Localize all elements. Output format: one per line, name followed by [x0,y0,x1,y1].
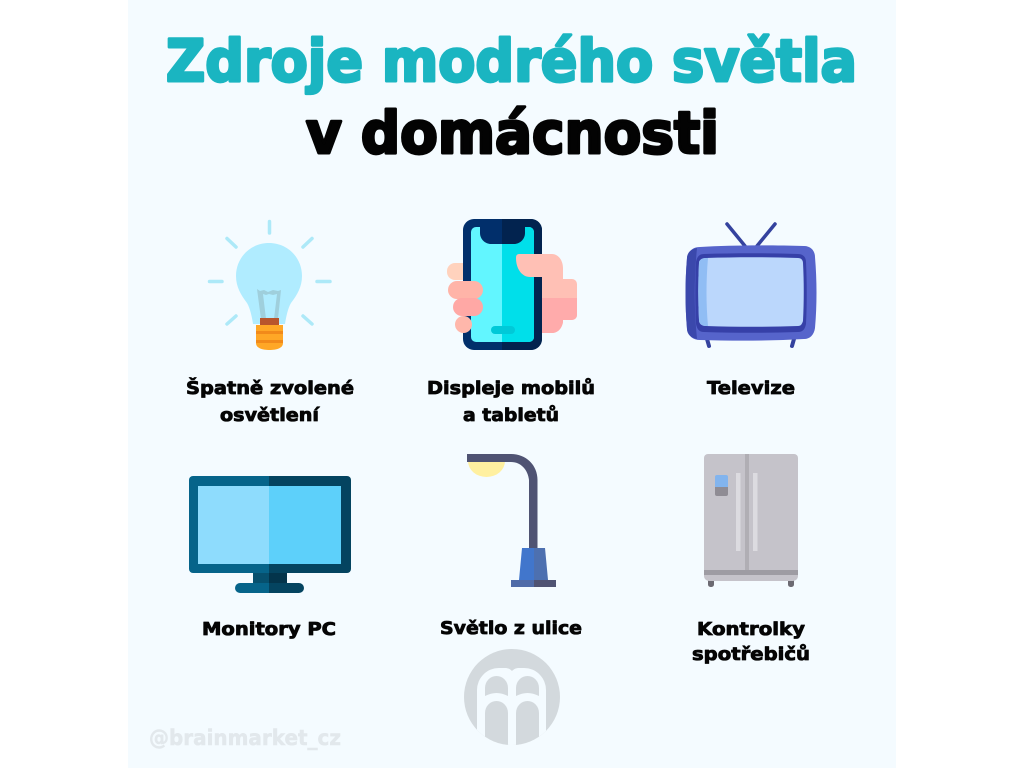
icon: light bulb [210,222,330,350]
label: Displeje mobilů a tabletů: a tabletů [463,404,559,426]
watermark handle: @brainmarket_cz [149,726,341,750]
icon: television [686,224,816,346]
label: Televize: Televize [707,378,795,399]
label: Displeje mobilů a tabletů: Displeje mobilů [427,377,595,399]
logo [464,649,560,750]
label: Kontrolky spotřebičů: Kontrolky [697,619,805,640]
title [166,27,857,167]
label: Displeje mobilů a tabletů [427,377,595,426]
label: Špatně zvolené osvětlení: Špatně zvolené [186,377,354,399]
label: Kontrolky spotřebičů [692,619,810,665]
label: Špatně zvolené osvětlení [186,377,354,426]
background panel [128,0,896,768]
icon: PC monitor [189,476,351,593]
title: Zdroje modrého světla [166,27,857,95]
title: v domácnosti [306,99,719,167]
icon: street lamp [467,454,556,587]
label: Špatně zvolené osvětlení: osvětlení [220,405,320,426]
icon: hand holding phone [447,219,577,350]
label: Světlo z ulice: Světlo z ulice [440,618,582,639]
label: Kontrolky spotřebičů: spotřebičů [692,643,810,665]
label: Monitory PC: Monitory PC [202,619,336,640]
icon: refrigerator [704,454,798,587]
